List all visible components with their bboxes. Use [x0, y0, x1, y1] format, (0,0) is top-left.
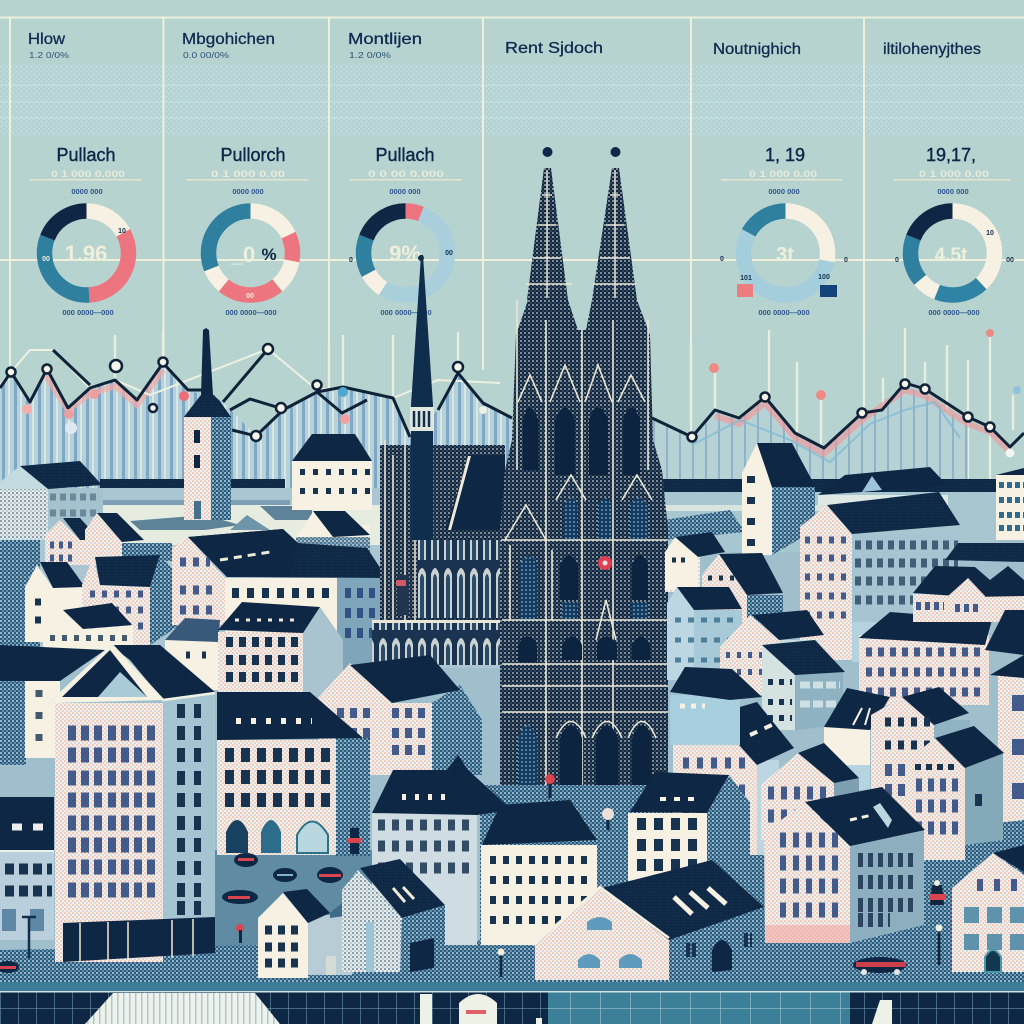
- building: cream gable E: [905, 726, 1004, 860]
- red rose ornament: [596, 556, 616, 640]
- building: low gable: [43, 603, 133, 650]
- building: pink house top center: [318, 655, 482, 775]
- heading: column 3: Montlijen: [348, 31, 422, 48]
- building: small cream gable: [761, 743, 859, 840]
- bollard: [498, 948, 504, 977]
- stat block: 1, 19: 0000 000: [768, 187, 800, 196]
- building: tall white gable: [742, 443, 815, 560]
- column headings: [28, 31, 981, 60]
- sublabels: [29, 51, 391, 60]
- stat block: 19,17,: [893, 145, 1011, 317]
- donut chart 4: 0: [720, 256, 724, 263]
- donut chart 5: 10: [986, 230, 994, 237]
- bottom fan canopy: [85, 993, 280, 1024]
- building: pink mid left: [82, 555, 187, 645]
- building: pale tall: [824, 688, 890, 790]
- spire right: [592, 168, 637, 300]
- stat block: Pullach 1: 0 1 000 0.000: [51, 169, 125, 179]
- stat block: Pullach 3: Pullach: [375, 145, 435, 165]
- building: far right white: [996, 468, 1024, 540]
- line chart right: [652, 380, 1024, 462]
- tower shopfront: [63, 917, 215, 962]
- chart bars left: [0, 363, 512, 490]
- chart markers left: [6, 344, 487, 441]
- stat block: 1, 19: 1, 19: [765, 145, 805, 165]
- building: dark strip right: [945, 543, 1024, 562]
- building: bottom-right house: [952, 845, 1024, 972]
- donut chart 5: 4.5t: [935, 245, 968, 266]
- donut chart 5: [895, 211, 1014, 295]
- donut chart 1: 10: [118, 228, 126, 235]
- chart bars right: [652, 385, 968, 490]
- building: grey small house: [762, 640, 845, 730]
- sublabels: 0.0 00/0%: [183, 51, 229, 60]
- barn windows: [578, 917, 642, 968]
- building: left low street block: [0, 797, 54, 958]
- chart markers right: [688, 380, 1014, 458]
- globe lamp: [602, 808, 614, 830]
- donut chart 1: [42, 211, 128, 295]
- donut chart 4: [720, 211, 848, 297]
- car 1: [234, 853, 258, 867]
- donut chart 4: 0: [844, 257, 848, 264]
- donut chart 2: 00: [246, 293, 254, 300]
- stat block: Pullorch: 0000 000: [232, 187, 264, 196]
- lamp post: [22, 917, 36, 958]
- stat block: 1, 19: 000 0000—000: [758, 308, 810, 317]
- stat block: Pullach 1: Pullach: [56, 145, 116, 165]
- donut chart 5: 00: [1006, 257, 1014, 264]
- stat block: 19,17,: 000 0000—000: [928, 308, 980, 317]
- third tier windows: [502, 545, 668, 620]
- building: left far block: [0, 461, 103, 540]
- car 3: [317, 867, 343, 883]
- bottom white posts: [420, 994, 892, 1024]
- donut chart 5: 0: [895, 257, 899, 264]
- line chart left: [0, 344, 512, 441]
- heading: column 6: iltilohenyjthes: [883, 41, 981, 58]
- building: big pink F: [764, 787, 925, 943]
- donut chart 4: 3t: [776, 244, 794, 266]
- building: small gable mid: [296, 511, 370, 553]
- stat block: Pullach 3: 0000 000: [389, 187, 421, 196]
- heading: column 4: Rent Sjdoch: [505, 40, 603, 57]
- chart pins: [115, 328, 1021, 497]
- heading: column 2: Mbgohichen: [182, 31, 275, 48]
- building: twin roofs right: [913, 566, 1024, 655]
- car 5 left: [0, 961, 19, 973]
- building: church tower: [184, 328, 231, 520]
- building: right apartment A: [673, 702, 794, 855]
- towers: [500, 300, 668, 785]
- street furniture right: [498, 774, 946, 977]
- right background buildings: [665, 443, 1024, 900]
- building: low wide roof: [818, 467, 948, 505]
- building: small cream house: [258, 889, 352, 978]
- second tier tracery: [501, 475, 668, 785]
- sublabels: 1.2 0/0%: [29, 51, 69, 60]
- building: small pink pair: [45, 513, 172, 565]
- building: front grid block: [218, 602, 343, 702]
- cathedral nave: [372, 440, 505, 665]
- stat block: Pullach 1: 000 0000—000: [62, 308, 114, 317]
- donut chart 4: 100: [818, 274, 830, 281]
- parked cars and pedestrians on the plaza: [0, 828, 361, 973]
- building: light blue roof: [670, 667, 762, 745]
- spire balls: [542, 147, 620, 157]
- portals: [518, 722, 656, 787]
- stat block: Pullorch: Pullorch: [220, 145, 286, 165]
- stat block: Pullach 3: 0 0 00 0.000: [368, 169, 444, 179]
- donut chart 2: _0: [230, 242, 255, 267]
- tower windows: [68, 733, 157, 890]
- building: white house left: [25, 562, 85, 642]
- building: house with dormers: [372, 755, 512, 945]
- building: arcade block: [217, 692, 370, 856]
- donut chart 3: [349, 211, 453, 295]
- building: large apartment tower: [50, 645, 215, 962]
- red car: [853, 957, 907, 975]
- donut chart 4: 101: [740, 275, 752, 282]
- stat block: Pullach 3: [349, 145, 462, 317]
- donut chart 2: %: [261, 245, 277, 264]
- sublabels: 1.2 0/0%: [349, 51, 391, 60]
- building: pink gable: [720, 610, 824, 695]
- stat block: Pullorch: 0 1 000 0.00: [211, 169, 285, 179]
- car 2: [273, 868, 297, 882]
- building: cream block: [481, 800, 597, 945]
- building: white house behind: [292, 434, 372, 510]
- mid ground: [0, 785, 1024, 985]
- heading: column 1: Hlow: [28, 31, 65, 48]
- street lamp red: [545, 774, 555, 798]
- stat block: Pullach 1: [29, 145, 141, 317]
- stat block: Pullorch: [186, 145, 308, 317]
- small spire: [410, 255, 434, 540]
- building: far right pink: [990, 655, 1024, 900]
- building: small slate roof: [165, 618, 220, 690]
- donut chart 3: 9%: [389, 241, 421, 266]
- building: pink row: [859, 612, 992, 705]
- stat block: 1, 19: [721, 145, 842, 317]
- lamp: [936, 924, 942, 965]
- donut chart 3: 00: [445, 250, 453, 257]
- stat block: 1, 19: 0 1 000 0.00: [749, 169, 817, 179]
- fourth tier arches: [502, 636, 668, 712]
- building: large L block: [172, 529, 387, 678]
- tall lancets: [517, 300, 648, 480]
- fire hydrant: [236, 924, 244, 943]
- spire left: [526, 168, 572, 300]
- building: small house b: [702, 553, 783, 625]
- building: barn left: [342, 859, 445, 972]
- pedestrian: [347, 828, 361, 854]
- bottom solar grid: [0, 991, 1024, 1024]
- heading: column 5: Noutnighich: [713, 41, 801, 58]
- stat block: Pullach 1: 0000 000: [71, 187, 103, 196]
- back town fabric: [0, 488, 1000, 740]
- stat block: 19,17,: 0000 000: [937, 187, 969, 196]
- building: cream gable D: [871, 687, 970, 815]
- building: left pale roofs: [0, 645, 105, 765]
- street band: [0, 982, 1024, 991]
- dotted texture band: [0, 64, 1024, 136]
- stat block: 19,17,: 19,17,: [926, 145, 976, 165]
- red sign: [929, 880, 946, 905]
- building: light blue house: [667, 587, 742, 680]
- car 4: [222, 890, 258, 904]
- stat block: Pullach 3: 000 0000—000: [380, 308, 432, 317]
- donut chart 3: 0: [349, 257, 353, 264]
- building: house G: [628, 772, 750, 881]
- donut chart 1: 1.96: [65, 241, 107, 266]
- donut chart 2: [208, 211, 292, 300]
- table grid lines: [0, 17, 1024, 370]
- arches: [226, 820, 328, 853]
- stat block: Pullorch: 000 0000—000: [225, 308, 277, 317]
- building: small house a: [665, 532, 725, 592]
- donut chart 1: 00: [42, 256, 50, 263]
- cathedral: [372, 147, 668, 787]
- stat block: 19,17,: 0 1 000 0.00: [919, 169, 989, 179]
- building: large apartment: [800, 492, 960, 662]
- horizon strip: [0, 479, 1024, 992]
- building: long barn H: [533, 860, 764, 981]
